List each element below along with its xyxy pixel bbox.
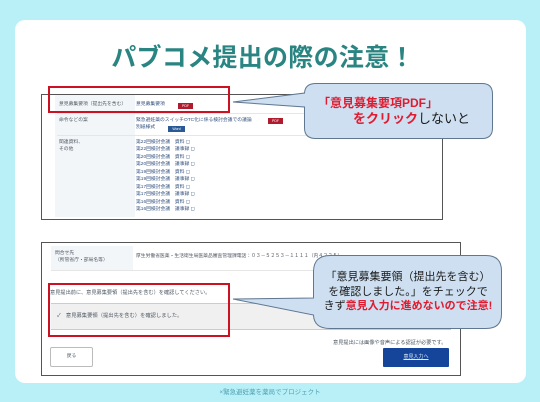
checkbox row <box>51 303 451 330</box>
callout text: bottom: を確認しました。」をチェックで <box>328 286 488 298</box>
row: related materials: 第20回検討会議 議事録 ◻ <box>136 162 195 167</box>
red highlight: top <box>48 86 230 113</box>
row: related materials <box>57 135 442 216</box>
callout text: top: をクリックしないと <box>353 111 470 126</box>
authentication note: 意見提出には画像や音声による認証が必要です。 <box>333 340 446 346</box>
panel: bottom screenshot <box>41 242 461 376</box>
callout text: top: 「意見募集要項PDF」 <box>318 96 438 110</box>
row: reference materials: 別紙様式 <box>136 125 155 130</box>
row: related materials: 第17回検討会議 議事録 ◻ <box>136 192 195 197</box>
contact row <box>51 246 451 271</box>
submit button <box>383 348 449 367</box>
row: related materials: 第19回検討会議 資料 ◻ <box>136 170 190 175</box>
callout: top <box>232 83 493 139</box>
row: related materials: 第16回検討会議 資料 ◻ <box>136 200 190 205</box>
row: application guidelines: PDF <box>182 104 189 108</box>
row: related materials: 第22回検討会議 議事録 ◻ <box>136 147 195 152</box>
checkbox row: ✓ 意見募集要領（提出先を含む）を確認しました。 <box>57 313 182 319</box>
row: application guidelines <box>59 100 193 109</box>
submit button: 意見入力へ <box>403 354 428 360</box>
callout: bottom <box>232 255 502 329</box>
row: related materials: 関連資料、 <box>59 140 83 145</box>
contact row: 厚生労働省医薬・生活衛生局医薬品審査管理課電話：０３－５２５３－１１１１（内４２２５） <box>136 254 342 259</box>
row: reference materials: 緊急避妊薬のスイッチOTC化に係る検討会議での議論 <box>136 118 252 123</box>
panel: top screenshot <box>41 94 443 220</box>
back button: 戻る <box>67 354 76 359</box>
callout text: bottom <box>324 270 492 312</box>
contact row: 問合せ先 <box>55 251 74 256</box>
row: reference materials: PDF <box>272 119 279 123</box>
table label column <box>55 95 135 217</box>
callout text: bottom: きず意見入力に進めないので注意! <box>324 300 492 312</box>
contact row: （所管省庁・部局名等） <box>55 258 108 263</box>
title: パブコメ提出の際の注意！ <box>111 44 415 72</box>
row: reference materials <box>57 113 442 136</box>
callout text: top <box>318 96 470 126</box>
callout text: bottom: 「意見募集要領（提出先を含む） <box>326 271 490 283</box>
row: related materials: 第16回検討会議 議事録 ◻ <box>136 207 195 212</box>
row: application guidelines: 意見募集要項 <box>136 102 165 107</box>
row: related materials: その他 <box>59 147 73 152</box>
row: related materials: 第19回検討会議 議事録 ◻ <box>136 177 195 182</box>
row: reference materials: 命令などの案 <box>59 118 88 123</box>
red highlight: bottom <box>48 283 230 337</box>
confirmation sentence: 意見提出前に、意見募集要領（提出先を含む）を確認してください。 <box>50 290 210 296</box>
row: related materials: 第22回検討会議 資料 ◻ <box>136 140 190 145</box>
back button <box>50 347 93 367</box>
row: related materials: 第17回検討会議 資料 ◻ <box>136 185 190 190</box>
row: reference materials: Word <box>172 127 181 131</box>
footer credit: ×緊急避妊薬を薬局でプロジェクト <box>219 389 321 396</box>
row: application guidelines: 意見募集要項（提出先を含む） <box>59 102 126 107</box>
row: related materials: 第20回検討会議 資料 ◻ <box>136 155 190 160</box>
